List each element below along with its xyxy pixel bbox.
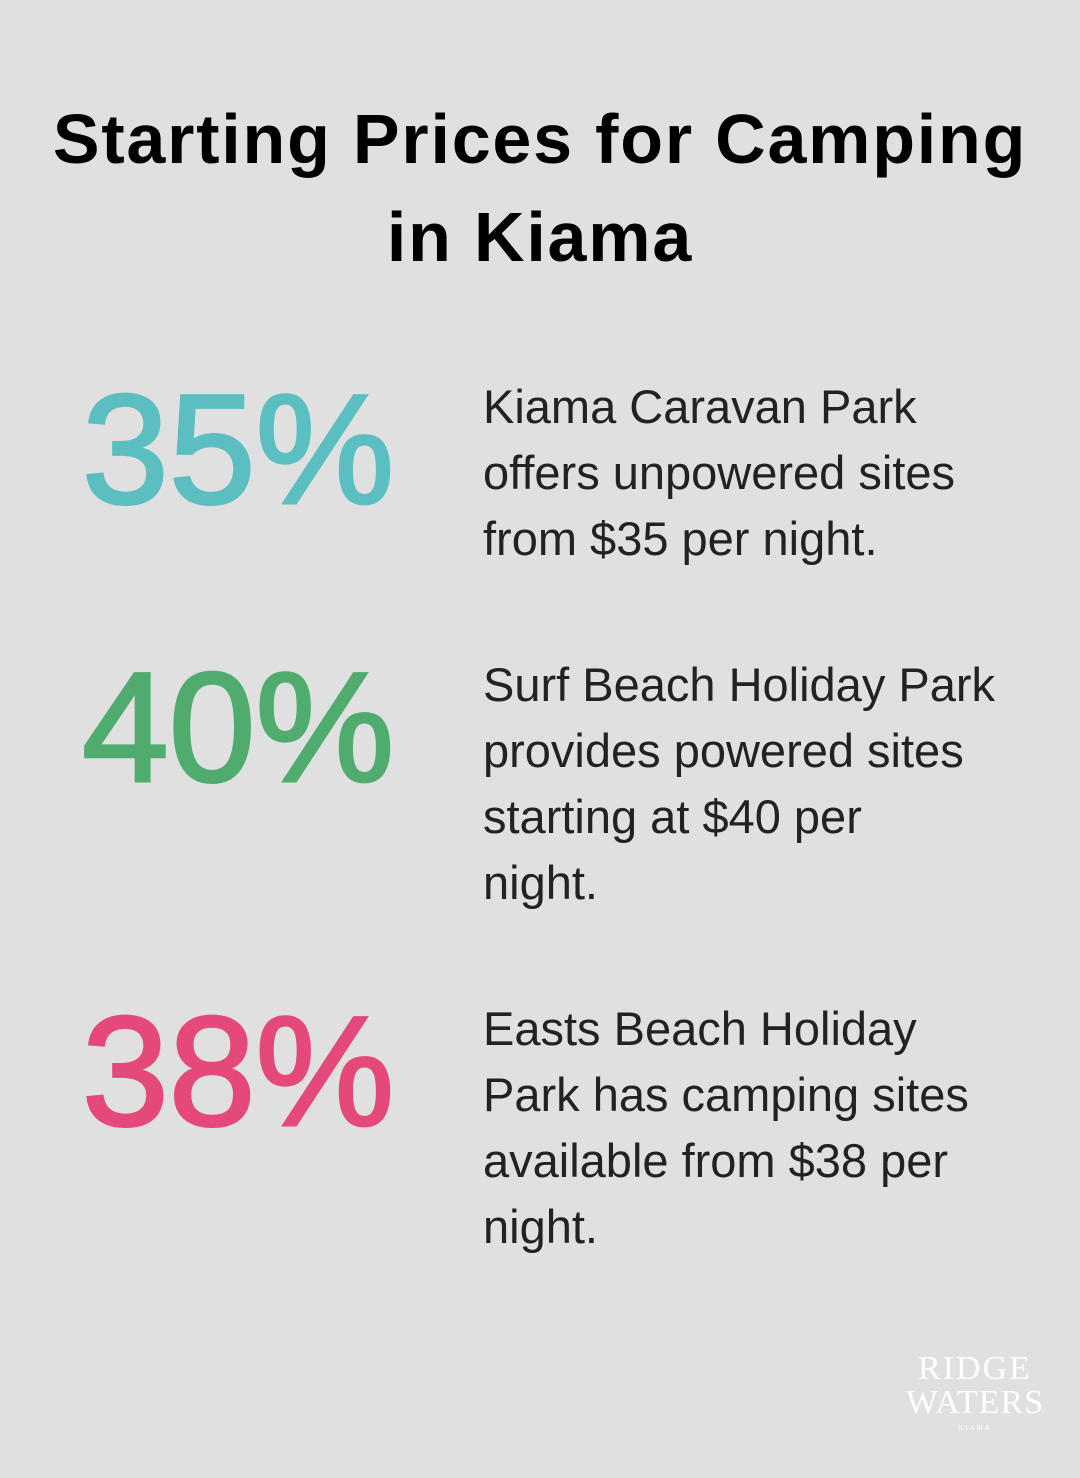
logo: WATERS xyxy=(906,1384,1044,1421)
stat 3 number: 38% xyxy=(82,985,394,1159)
logo: KIAMA xyxy=(958,1424,992,1432)
stat 2 text: Surf Beach Holiday Park xyxy=(483,658,995,711)
stat 2 text xyxy=(483,658,995,909)
title: in Kiama xyxy=(387,198,693,276)
stat 2 text: provides powered sites xyxy=(483,724,964,777)
stat 3 text: available from $38 per xyxy=(483,1134,948,1187)
stat 3 text: night. xyxy=(483,1200,598,1253)
title: Starting Prices for Camping xyxy=(53,100,1027,178)
title xyxy=(53,100,1027,276)
stat 1 number: 35% xyxy=(82,363,394,537)
stat 2 text: night. xyxy=(483,856,598,909)
stat 3 text xyxy=(483,1002,969,1253)
stat 3 text: Easts Beach Holiday xyxy=(483,1002,917,1055)
stat 2 text: starting at $40 per xyxy=(483,790,862,843)
stat 1 text: offers unpowered sites xyxy=(483,446,955,499)
stat 2 number: 40% xyxy=(82,641,394,815)
stat 3 text: Park has camping sites xyxy=(483,1068,969,1121)
stat 1 text: Kiama Caravan Park xyxy=(483,380,917,433)
stat 1 text xyxy=(483,380,955,565)
logo xyxy=(906,1350,1044,1432)
stat 1 text: from $35 per night. xyxy=(483,512,878,565)
logo: RIDGE xyxy=(918,1350,1032,1387)
